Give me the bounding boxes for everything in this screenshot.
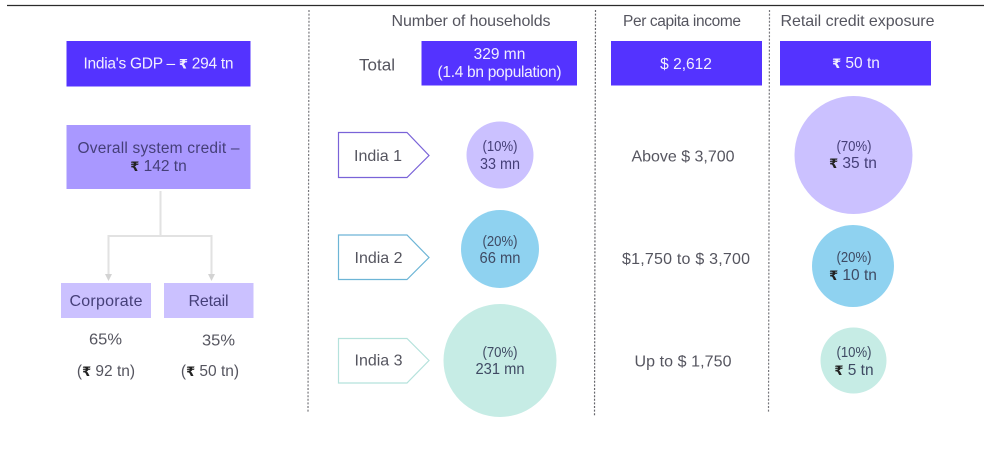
bubble: India 1 retail credit [794, 96, 912, 214]
heading: retail credit exposure: Retail credit exposure [780, 13, 935, 30]
text: corporate share [77, 332, 135, 380]
box: overall system credit: Overall system credit – [78, 140, 240, 157]
bubble: India 2 households: (20%) [482, 234, 518, 250]
text: retail share: 35% [202, 332, 235, 350]
text: India 2 income: $1,750 to $ 3,700 [622, 251, 750, 268]
tag: India 3 [338, 338, 429, 383]
text: corporate share: (₹ 92 tn) [77, 363, 135, 380]
box: retail [164, 283, 254, 318]
heading: number of households: Number of households [392, 13, 550, 30]
bubble: India 2 retail credit: ₹ 10 tn [829, 267, 877, 284]
bubble: India 1 households [466, 122, 534, 188]
box: overall system credit: ₹ 142 tn [130, 158, 187, 175]
box: total households: 329 mn [474, 46, 525, 63]
box: retail: Retail [188, 293, 228, 310]
text: retail share [181, 332, 239, 380]
bubble: India 2 households: 66 mn [480, 250, 520, 267]
text: India 3 income: Up to $ 1,750 [634, 354, 732, 370]
box: overall system credit [66, 125, 250, 189]
box: total households [422, 41, 577, 86]
heading: per capita income: Per capita income [623, 13, 741, 30]
bubble: India 1 retail credit: ₹ 35 tn [829, 155, 877, 172]
box: total households: (1.4 bn population) [438, 64, 562, 81]
label: total: Total [359, 56, 395, 74]
tag: India 2 [338, 235, 429, 280]
bubble: India 1 households: 33 mn [480, 156, 520, 173]
bubble: India 3 retail credit: ₹ 5 tn [834, 362, 874, 379]
tag: India 1 [338, 132, 429, 178]
bubble: India 2 households [461, 210, 539, 288]
box: corporate: Corporate [70, 293, 143, 310]
text: corporate share: 65% [89, 332, 122, 348]
bubble: India 2 retail credit [812, 225, 894, 307]
box: total per capita income [611, 41, 762, 86]
bubble: India 1 households: (10%) [482, 139, 518, 155]
tag: India 2: India 2 [354, 250, 403, 267]
tag: India 1: India 1 [354, 148, 402, 165]
connector: credit split arrows [105, 191, 215, 281]
bubble: India 3 households: 231 mn [476, 361, 524, 378]
box: India's GDP [66, 41, 250, 86]
bubble: India 3 households [444, 304, 556, 417]
bubble: India 2 retail credit: (20%) [836, 250, 872, 266]
box: total retail credit [780, 41, 931, 86]
box: India's GDP: India's GDP – ₹ 294 tn [84, 56, 234, 72]
bubble: India 3 retail credit [820, 328, 886, 394]
box: corporate [61, 283, 151, 318]
bubble: India 3 retail credit: (10%) [836, 345, 872, 361]
tag: India 3: India 3 [354, 352, 403, 370]
panel: GDP and system credit breakdown [61, 41, 254, 380]
text: retail share: (₹ 50 tn) [181, 363, 239, 380]
bubble: India 1 retail credit: (70%) [836, 139, 872, 155]
box: total per capita income: $ 2,612 [660, 56, 712, 73]
bubble: India 3 households: (70%) [482, 345, 518, 361]
text: India 1 income: Above $ 3,700 [632, 148, 735, 166]
box: total retail credit: ₹ 50 tn [832, 55, 880, 72]
